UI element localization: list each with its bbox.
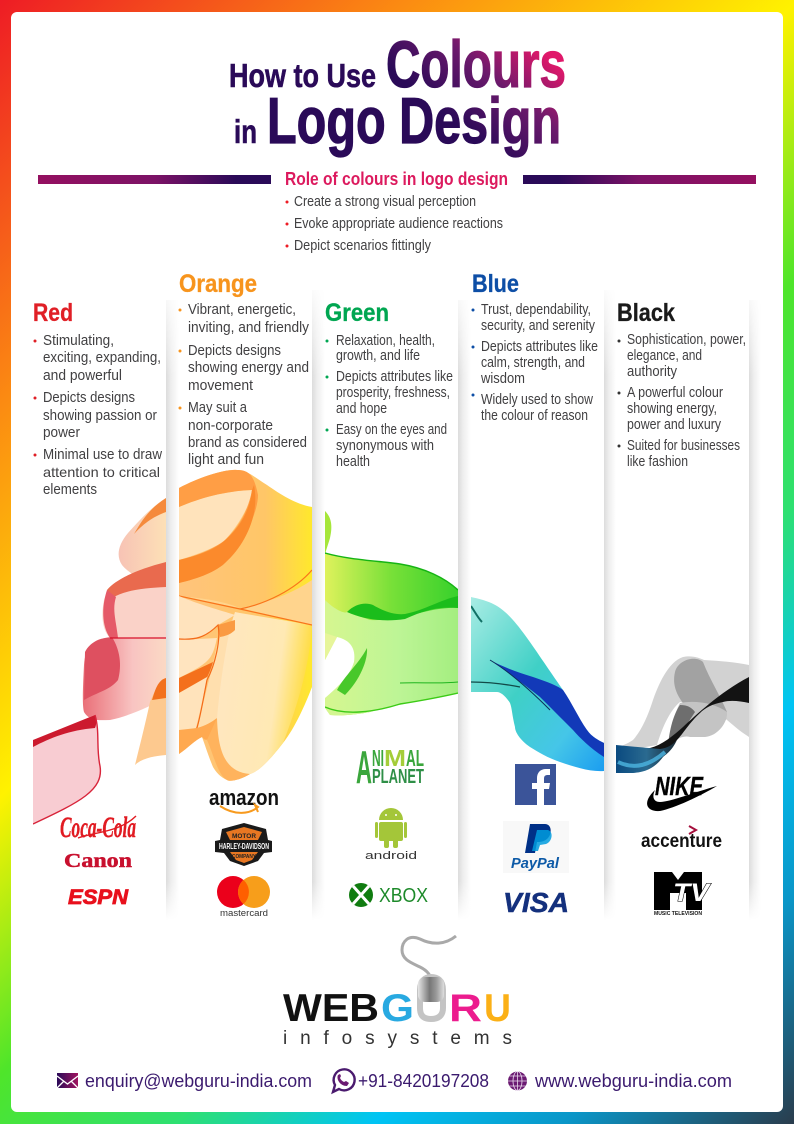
orange text: brand as considered <box>188 435 307 451</box>
logo: amazon: amazon <box>209 785 279 810</box>
role bullets <box>286 194 503 254</box>
panel: blue <box>471 270 604 771</box>
black text: A powerful colour <box>627 385 723 401</box>
logo: animal planet: A <box>356 741 372 793</box>
orange heading: Orange <box>179 270 257 298</box>
orange text: May suit a <box>188 400 248 416</box>
logo: android: android <box>365 850 417 862</box>
green text: Depicts attributes like <box>336 369 453 385</box>
orange text: Depicts designs <box>188 343 281 359</box>
black text: Sophistication, power, <box>627 332 746 348</box>
logo: android <box>365 808 417 862</box>
orange text: light and fun <box>188 452 264 468</box>
green text: growth, and life <box>336 348 420 364</box>
icon: phone <box>333 1069 355 1092</box>
email address: enquiry@webguru-india.com <box>85 1070 312 1091</box>
panel: orange <box>178 270 312 781</box>
wordmark: R <box>449 987 482 1030</box>
phone number: +91-8420197208 <box>358 1070 489 1091</box>
logo: mastercard <box>217 876 270 918</box>
red text: exciting, expanding, <box>43 350 161 366</box>
red text: showing passion or <box>43 408 157 424</box>
logo: animal planet <box>356 741 424 793</box>
black bullets <box>618 340 620 448</box>
logo: harley-davidson: HARLEY-DAVIDSON <box>219 842 269 851</box>
blue text: Trust, dependability, <box>481 302 591 318</box>
logo: canon: Canon <box>64 850 132 872</box>
wordmark: G <box>381 987 414 1030</box>
blue text <box>480 302 598 424</box>
panel: green <box>325 299 458 715</box>
column divider shadows <box>166 290 761 920</box>
orange text: showing energy and <box>188 360 309 376</box>
blue text: security, and serenity <box>481 318 596 334</box>
logo: visa: VISA <box>503 887 569 918</box>
red text: Depicts designs <box>43 390 135 406</box>
panel: red <box>33 299 166 824</box>
orange text: non-corporate <box>188 418 273 434</box>
role bullets: Create a strong visual perception <box>294 194 476 210</box>
red ribbon <box>33 498 166 824</box>
title: How to Use <box>229 57 376 94</box>
red bullets <box>34 340 36 456</box>
blue text: wisdom <box>480 371 525 387</box>
logo: harley-davidson: MOTOR <box>232 833 256 840</box>
blue bullets <box>472 308 474 396</box>
website: www.webguru-india.com <box>534 1070 732 1091</box>
orange text: inviting, and friendly <box>188 320 310 336</box>
logo: mastercard: mastercard <box>220 908 268 918</box>
black text <box>627 332 746 470</box>
logo: coca-cola: Coca-Cola <box>60 811 136 844</box>
logo: animal planet: AL <box>406 745 424 771</box>
black text: Suited for businesses <box>627 438 740 454</box>
left heading bar <box>38 175 271 184</box>
logo: mtv: MUSIC TELEVISION <box>654 911 702 917</box>
role heading: Role of colours in logo design <box>285 169 508 189</box>
blue text: calm, strength, and <box>481 355 585 371</box>
logo: accenture: accenture <box>641 831 722 852</box>
tagline: infosystems <box>283 1028 512 1049</box>
logo: harley-davidson: COMPANY <box>232 854 256 860</box>
logo: mtv: TV <box>673 879 712 907</box>
red text: Minimal use to draw <box>43 447 162 463</box>
red text: attention to critical <box>43 464 160 480</box>
right heading bar <box>523 175 756 184</box>
red text: and powerful <box>43 368 122 384</box>
green ribbon <box>325 511 458 715</box>
blue text: the colour of reason <box>481 408 588 424</box>
green text: Relaxation, health, <box>336 333 435 349</box>
green heading: Green <box>325 299 389 327</box>
green text: prosperity, freshness, <box>336 385 450 401</box>
title: Logo Design <box>267 84 561 157</box>
green text: Easy on the eyes and <box>336 422 447 438</box>
logo: mtv <box>654 872 712 917</box>
logo: paypal: PayPal <box>511 855 560 872</box>
black text: showing energy, <box>627 401 717 417</box>
logo: paypal <box>503 821 569 873</box>
title: Colours <box>386 27 566 101</box>
logo: harley-davidson <box>215 823 272 866</box>
role of colours block <box>285 169 508 254</box>
black text: like fashion <box>627 454 688 470</box>
orange text: Vibrant, energetic, <box>188 302 296 318</box>
title <box>229 27 566 157</box>
logo: animal planet: PLANET <box>372 766 424 788</box>
black text: power and luxury <box>627 417 722 433</box>
red text: Stimulating, <box>43 333 114 349</box>
role bullets: Depict scenarios fittingly <box>294 238 432 254</box>
logo: coca-cola <box>60 811 136 844</box>
red heading: Red <box>33 299 73 327</box>
icon: email <box>57 1073 78 1088</box>
logo: nike <box>647 771 717 811</box>
red text: elements <box>43 482 97 498</box>
logo: animal planet: M <box>384 745 406 771</box>
wordmark <box>283 987 511 1030</box>
blue heading: Blue <box>472 270 519 298</box>
blue ribbon <box>471 597 604 771</box>
green text <box>336 333 453 470</box>
contact row <box>57 1069 732 1092</box>
logo: facebook <box>515 764 556 805</box>
black ribbon <box>616 656 749 773</box>
webguru logo <box>283 936 512 1049</box>
logo: xbox: XBOX <box>379 885 428 907</box>
red text: power <box>43 425 80 441</box>
blue text: Depicts attributes like <box>481 339 598 355</box>
logo: xbox <box>349 883 428 907</box>
mouse body <box>418 977 444 1019</box>
logo: animal planet: NI <box>372 745 384 771</box>
logo: nike: NIKE <box>655 771 704 801</box>
role bullets: Evoke appropriate audience reactions <box>294 216 503 232</box>
orange bullets <box>178 308 182 410</box>
wordmark: WEB <box>283 987 379 1030</box>
red text <box>43 333 162 498</box>
black heading: Black <box>617 299 675 327</box>
green bullets <box>326 340 328 432</box>
title: in <box>234 113 257 150</box>
mouse cable <box>402 936 456 980</box>
black text: elegance, and <box>627 348 702 364</box>
orange text: movement <box>188 378 253 394</box>
green text: and hope <box>336 401 387 417</box>
panel: black <box>616 299 749 773</box>
orange ribbon <box>179 470 312 781</box>
icon: globe <box>508 1072 527 1090</box>
wordmark: U <box>484 987 511 1030</box>
logo: espn: ESPN <box>68 886 129 909</box>
black text: authority <box>627 364 678 380</box>
orange text <box>188 302 310 468</box>
green text: synonymous with <box>336 438 434 454</box>
blue text: Widely used to show <box>481 392 593 408</box>
green text: health <box>336 454 370 470</box>
